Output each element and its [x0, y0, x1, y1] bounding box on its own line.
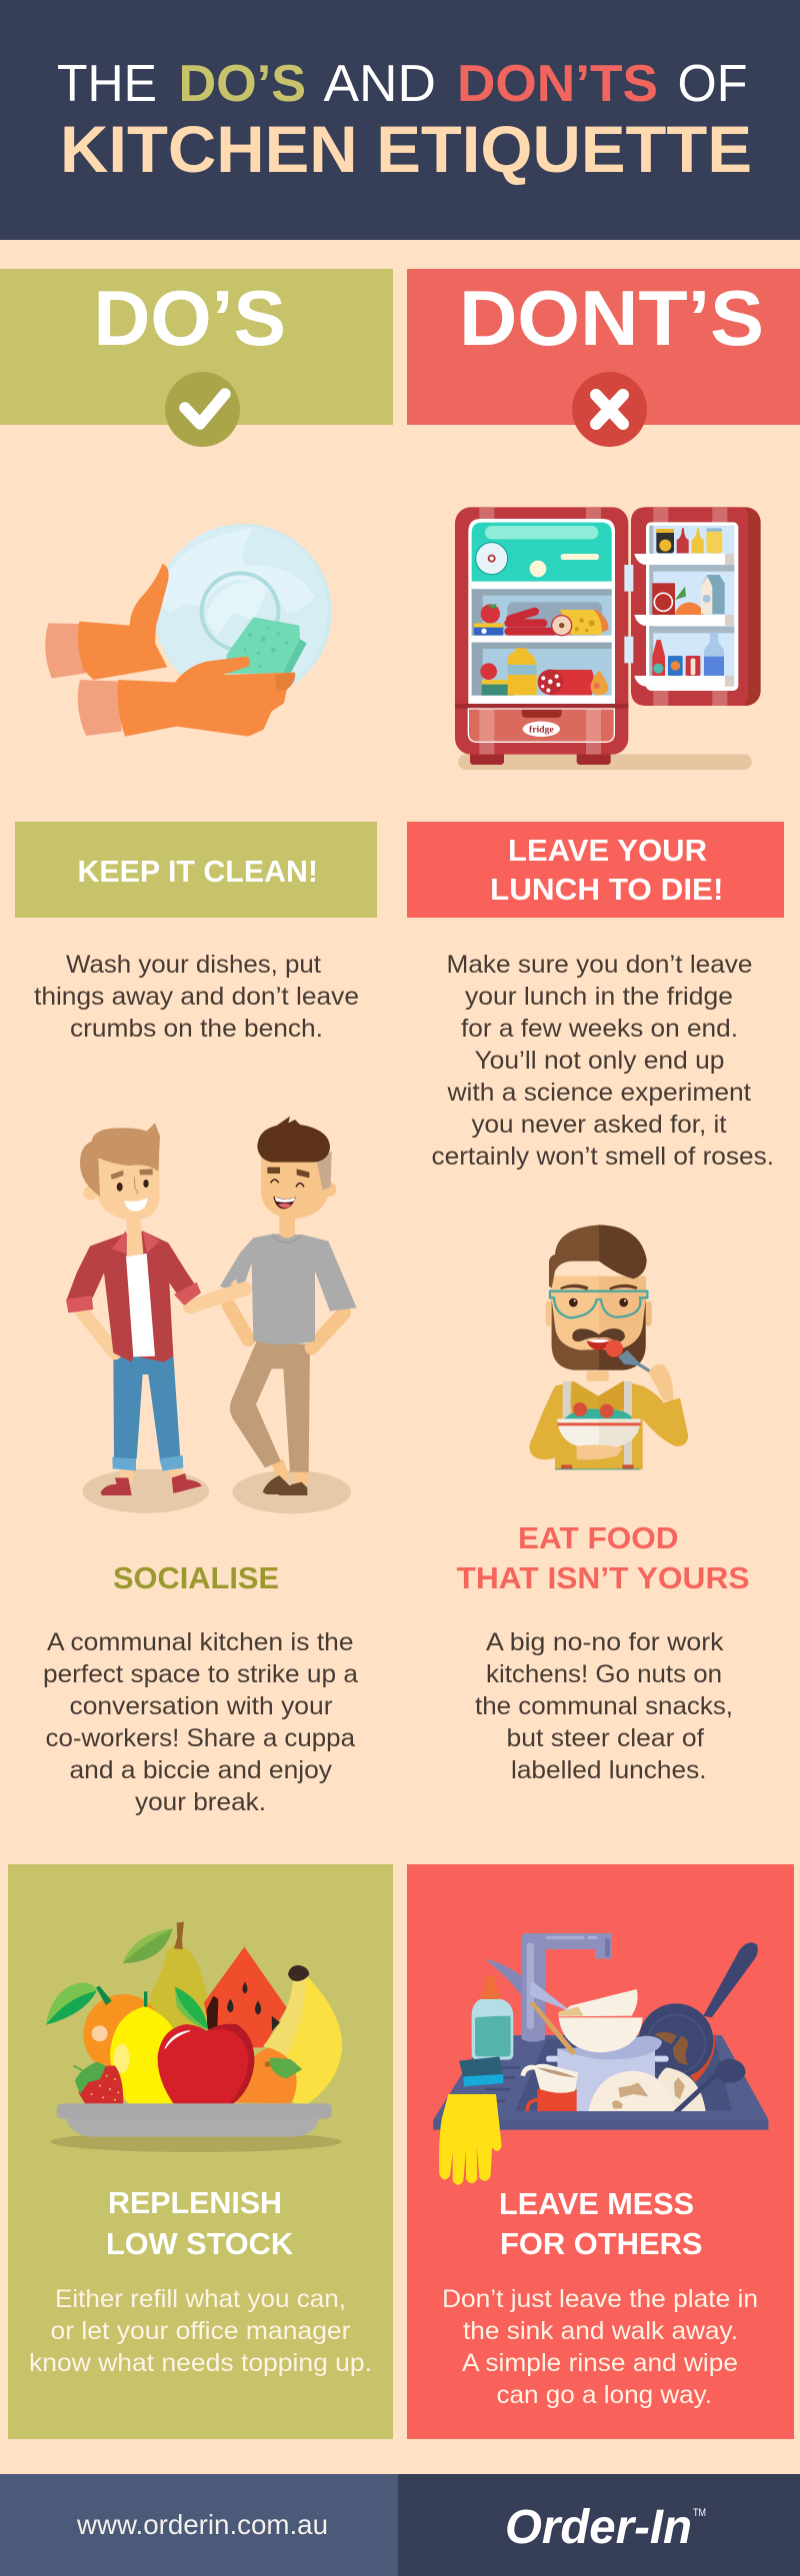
panel: replenish low stock	[8, 1864, 393, 2439]
text block: keep it clean: crumbs on the bench.	[70, 1015, 323, 1043]
panel: replenish low stock: LOW STOCK	[106, 2226, 294, 2261]
dirty plates	[588, 2067, 706, 2111]
text block: replenish: Either refill what you can,	[55, 2285, 346, 2313]
illustration: gloved hands washing a plate	[45, 524, 332, 737]
upper glove	[78, 564, 169, 680]
footer: logo: TM	[693, 2507, 706, 2519]
mug and cup	[523, 2064, 578, 2111]
hair	[549, 1225, 599, 1288]
banana	[263, 1977, 342, 2104]
title line 1	[57, 55, 748, 113]
door shelves	[634, 554, 725, 687]
text block: replenish: know what needs topping up.	[29, 2349, 372, 2377]
lower cuff	[78, 680, 122, 736]
stacked bowls	[558, 1989, 643, 2052]
plate	[65, 2116, 320, 2137]
panel: don'ts heading	[407, 269, 800, 447]
ladle	[673, 2058, 746, 2112]
face	[546, 1301, 552, 1326]
panel: leave mess for others	[407, 1864, 794, 2439]
text block: leave mess: can go a long way.	[496, 2381, 712, 2409]
man on left	[66, 1123, 245, 1495]
text block: replenish: or let your office manager	[50, 2317, 350, 2345]
eyebrows, eyes, glasses	[560, 1285, 637, 1290]
lemon	[110, 2006, 175, 2103]
text block: leave your lunch: with a science experiment	[446, 1079, 751, 1107]
drawer	[455, 704, 628, 709]
cooking pot	[546, 2036, 669, 2111]
shelf one	[472, 589, 612, 636]
peach	[233, 2047, 297, 2103]
text block: socialise: your break.	[135, 1788, 266, 1816]
text block: socialise: perfect space to strike up a	[43, 1660, 358, 1688]
title line 2: KITCHEN ETIQUETTE	[60, 112, 752, 186]
heading: eat food that isn't yours: THAT ISN’T YOURS	[456, 1560, 750, 1595]
pear	[150, 1944, 208, 2029]
text block: leave your lunch: Make sure you don’t leave	[446, 951, 752, 979]
door middle shelf items	[652, 583, 675, 615]
fridge body	[455, 507, 628, 755]
apple	[175, 1987, 208, 2030]
text block: leave your lunch: certainly won’t smell of roses.	[432, 1143, 774, 1171]
hinges	[624, 565, 633, 663]
wooden spoon	[529, 2002, 577, 2055]
text block: eat food: labelled lunches.	[511, 1756, 706, 1784]
illustration: man with glasses eating	[530, 1225, 688, 1469]
title line 1: THE	[57, 55, 157, 113]
footer: logo: Order-In	[505, 2501, 692, 2554]
text block: socialise: and a biccie and enjoy	[70, 1756, 333, 1784]
illustration: fruit plate	[46, 1922, 342, 2152]
fridge door	[631, 507, 761, 706]
door bottom shelf items	[652, 640, 665, 676]
illustration: sink full of dirty dishes	[433, 1933, 768, 2185]
text block: eat food	[475, 1628, 733, 1784]
sink	[433, 2035, 768, 2130]
title line 1: DO’S	[178, 55, 306, 113]
panel: do's heading: DO’S	[94, 274, 286, 362]
yellow glove	[439, 2094, 502, 2185]
title line 1: DON’TS	[457, 55, 658, 113]
text block: leave your lunch: You’ll not only end up	[474, 1047, 724, 1075]
tomato and fork	[606, 1339, 623, 1357]
heading: replenish: REPLENISH	[108, 2185, 282, 2220]
man on right	[220, 1117, 357, 1495]
text block: leave mess: A simple rinse and wipe	[462, 2349, 738, 2377]
text block: eat food: A big no-no for work	[486, 1628, 724, 1656]
sponge	[227, 617, 307, 674]
text block: leave your lunch: your lunch in the fridge	[465, 983, 733, 1011]
footer: logo	[398, 2474, 800, 2576]
panel: don'ts heading: DONT’S	[459, 274, 764, 362]
text block: socialise: A communal kitchen is the	[47, 1628, 354, 1656]
text block: socialise: co-workers! Share a cuppa	[46, 1724, 355, 1752]
beard	[552, 1299, 599, 1370]
heading: leave mess: LEAVE MESS	[499, 2186, 694, 2221]
text block: eat food: but steer clear of	[506, 1724, 704, 1752]
text block: eat food: the communal snacks,	[475, 1692, 733, 1720]
illustration: open fridge	[455, 507, 761, 770]
text block: leave mess	[442, 2285, 758, 2409]
fridge badge: fridge	[529, 725, 554, 736]
panel: keep it clean	[15, 822, 377, 918]
text block: replenish	[29, 2285, 372, 2377]
text block: leave your lunch: you never asked for, it	[472, 1111, 727, 1139]
moustache	[572, 1328, 625, 1341]
soap bottle	[472, 1975, 513, 2060]
upper cuff	[45, 623, 86, 679]
neck	[587, 1371, 609, 1381]
heading: socialise: SOCIALISE	[113, 1560, 279, 1595]
lower glove	[117, 657, 295, 737]
mustard jumper	[530, 1381, 688, 1469]
bowl of salad	[557, 1402, 641, 1447]
text block: eat food: kitchens! Go nuts on	[486, 1660, 722, 1688]
faucet	[485, 1933, 612, 2042]
door top shelf items	[656, 529, 674, 553]
text block: leave your lunch: for a few weeks on end.	[461, 1015, 738, 1043]
frying pan	[639, 1942, 758, 2082]
text block: keep it clean: Wash your dishes, put	[66, 951, 321, 979]
watermelon	[204, 1947, 287, 2047]
illustration: two men socialising	[66, 1117, 357, 1513]
footer: website	[0, 2474, 398, 2576]
text block: leave mess: Don’t just leave the plate in	[442, 2285, 758, 2313]
text block: keep it clean: things away and don’t leave	[34, 983, 359, 1011]
title line 1: AND	[324, 55, 436, 113]
panel: leave your lunch to die: LEAVE YOUR	[508, 833, 707, 868]
heading: eat food that isn't yours: EAT FOOD	[518, 1520, 678, 1555]
sponge	[459, 2056, 503, 2086]
panel: do's heading	[0, 269, 393, 447]
text block: keep it clean	[34, 951, 359, 1043]
shelf two	[472, 643, 612, 696]
panel: leave mess for others: FOR OTHERS	[500, 2226, 702, 2261]
panel: leave your lunch to die: LUNCH TO DIE!	[490, 872, 724, 907]
heading: eat food that isn't yours	[456, 1520, 750, 1595]
panel: keep it clean: KEEP IT CLEAN!	[78, 854, 318, 889]
text block: socialise	[43, 1628, 358, 1816]
strawberry	[78, 2065, 123, 2103]
text block: leave your lunch	[432, 951, 774, 1171]
panel: leave your lunch to die	[407, 822, 784, 918]
footer: website: www.orderin.com.au	[76, 2509, 328, 2540]
header banner	[0, 0, 800, 240]
text block: leave mess: the sink and walk away.	[463, 2317, 738, 2345]
title line 1: OF	[678, 55, 748, 113]
text block: socialise: conversation with your	[70, 1692, 332, 1720]
orange	[83, 1994, 163, 2074]
